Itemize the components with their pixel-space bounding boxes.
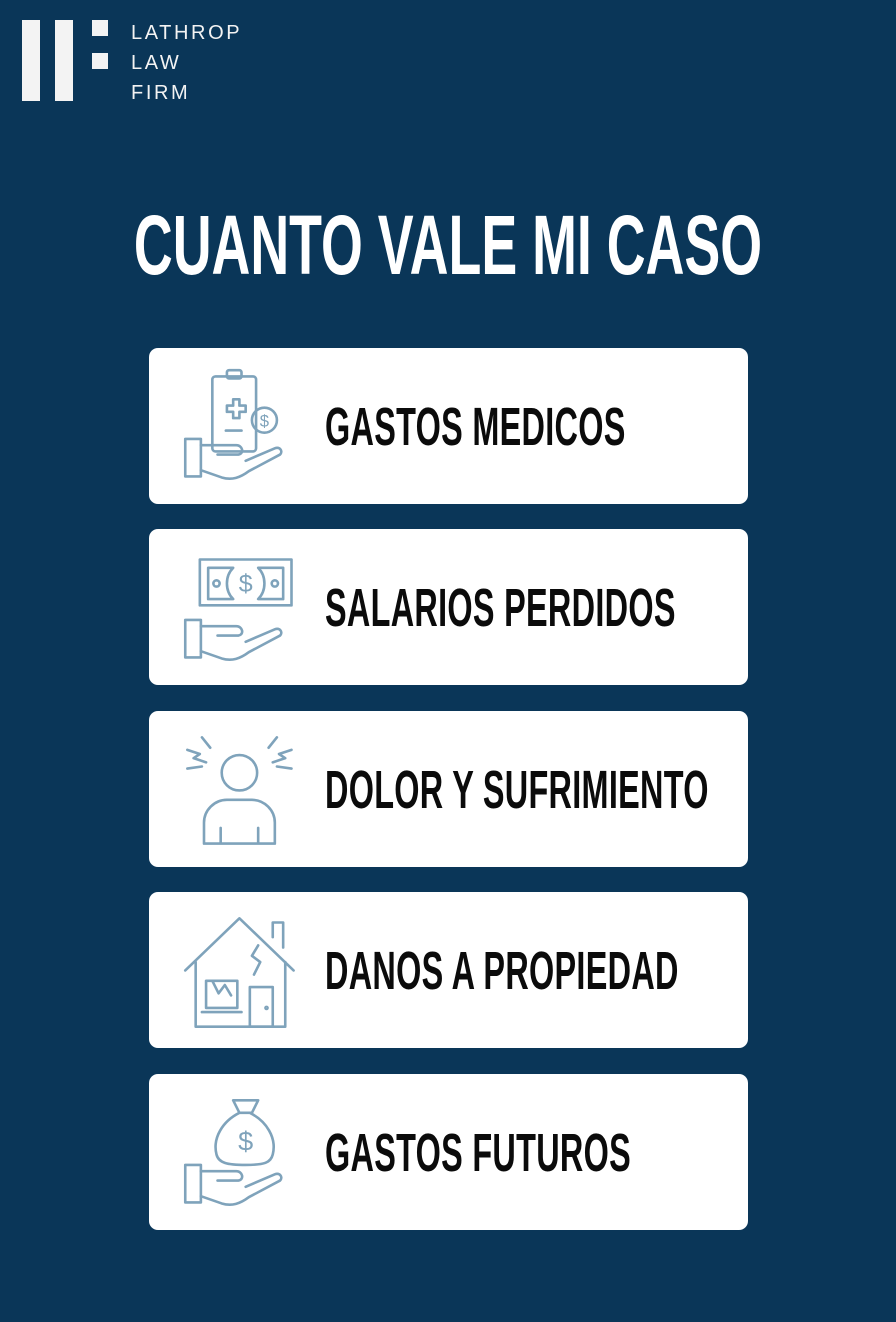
icon: money bag in hand: $ (238, 1125, 253, 1156)
logo text (131, 22, 242, 104)
label: DOLOR Y SUFRIMIENTO (325, 760, 709, 820)
label: DANOS A PROPIEDAD (325, 941, 679, 1001)
card: gastos futuros (149, 1074, 748, 1230)
icon: money in hand: $ (239, 570, 253, 598)
icon: money in hand (184, 558, 293, 661)
icon: damaged house (184, 917, 295, 1028)
icon: medical bill in hand (184, 368, 283, 480)
label: GASTOS MEDICOS (325, 397, 626, 457)
title: CUANTO VALE MI CASO (134, 198, 762, 292)
card: salarios perdidos (149, 529, 748, 685)
card: dolor y sufrimiento (149, 711, 748, 867)
icon: person in pain (186, 736, 293, 845)
icon: money bag in hand (184, 1099, 283, 1206)
icon: medical bill in hand: $ (260, 411, 269, 430)
logo text: FIRM (131, 82, 190, 104)
logo text: LAW (131, 52, 181, 74)
logo (22, 20, 242, 104)
logo text: LATHROP (131, 22, 242, 44)
card: danos a propiedad (149, 892, 748, 1048)
label: GASTOS FUTUROS (325, 1123, 631, 1183)
card: gastos medicos (149, 348, 748, 504)
label: SALARIOS PERDIDOS (325, 578, 676, 638)
